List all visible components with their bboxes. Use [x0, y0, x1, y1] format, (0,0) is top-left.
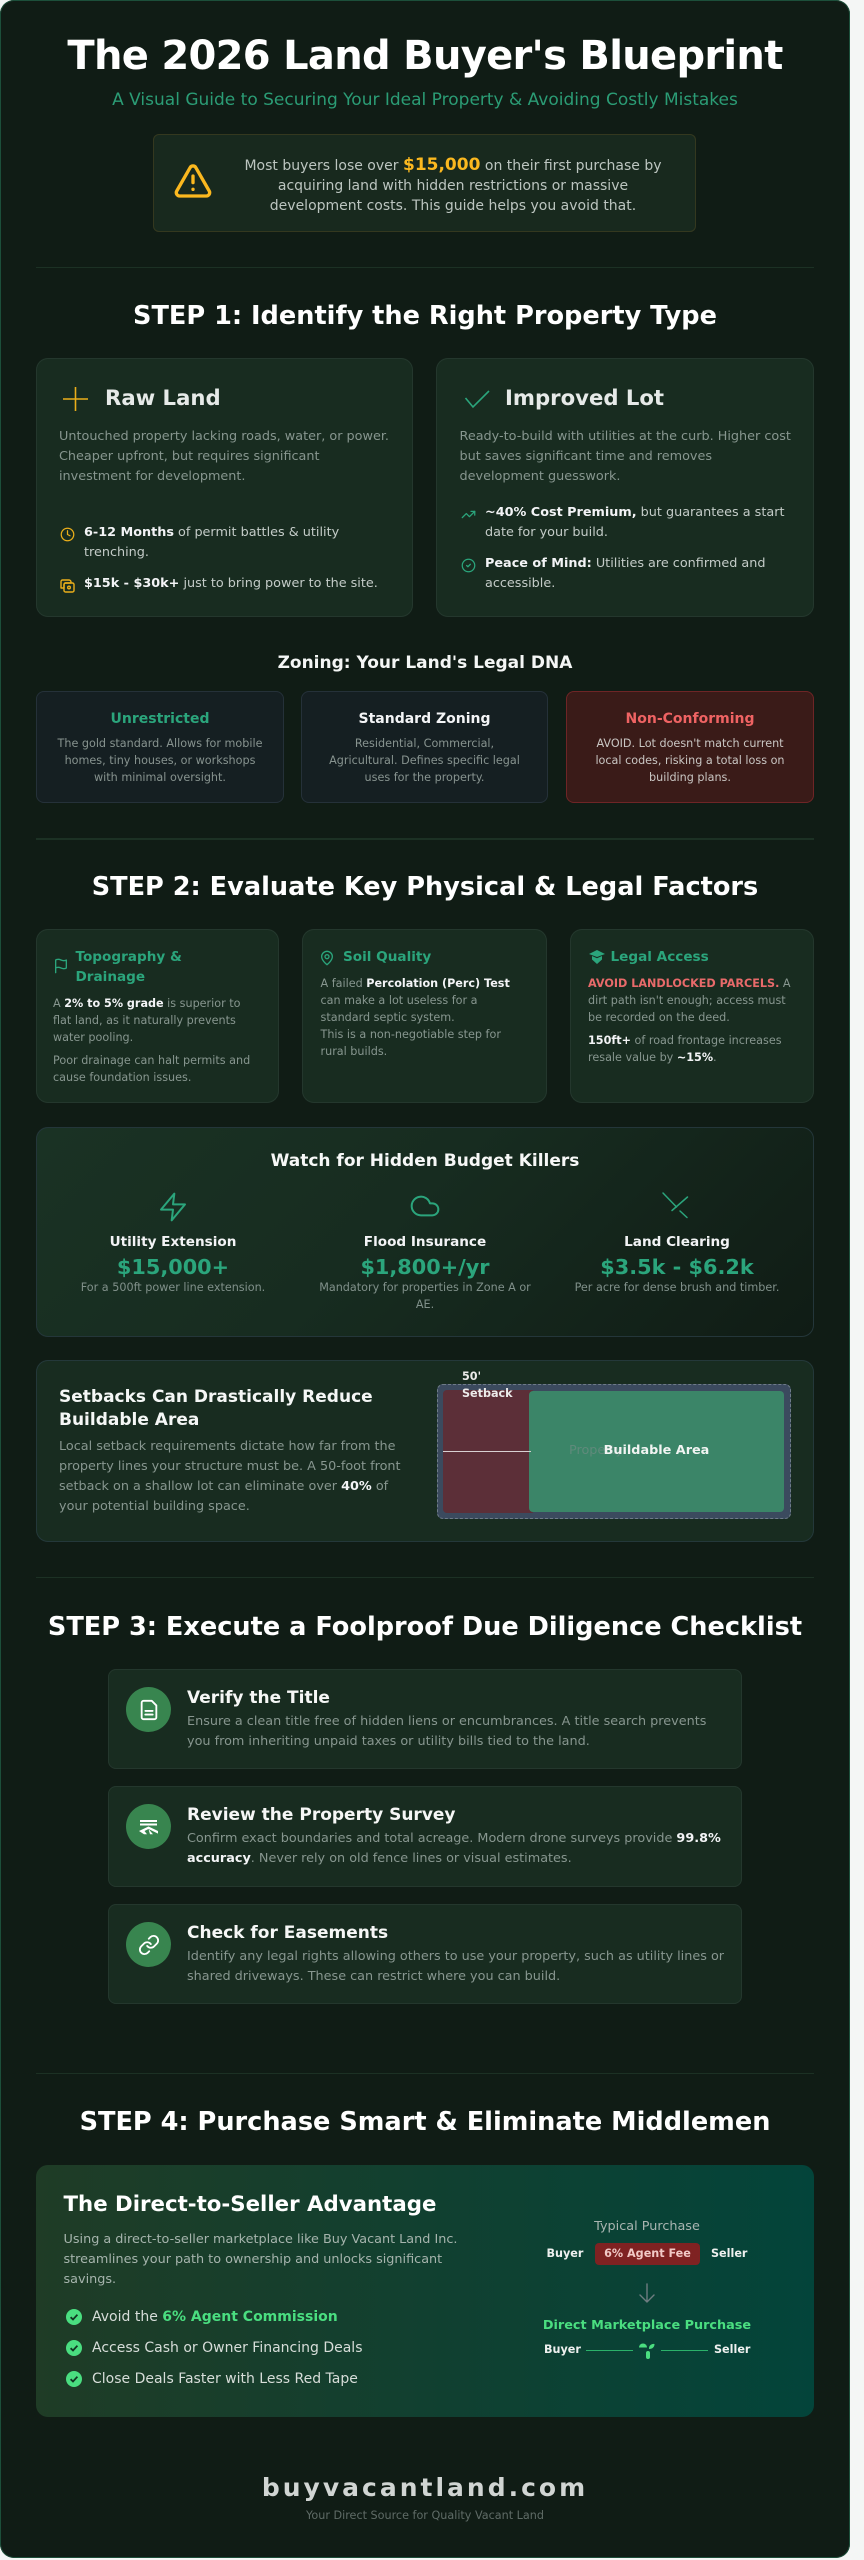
direct purchase label: Direct Marketplace Purchase [543, 2318, 751, 2333]
standard zoning description: Agricultural. Defines specific legal [329, 754, 520, 767]
easements text: Identify any legal rights allowing others to use your property, such as utility lines or [187, 1949, 724, 1964]
setback measure line [443, 1451, 531, 1452]
icon: document [126, 1687, 171, 1732]
callout text [244, 155, 662, 214]
cost premium fact: date for your build. [485, 525, 608, 540]
panel: unrestricted [36, 691, 284, 803]
setbacks heading: Setbacks Can Drastically Reduce [59, 1386, 373, 1406]
permit time fact: trenching. [84, 545, 149, 560]
soil quality text: rural builds. [320, 1044, 387, 1058]
verify title text [187, 1714, 706, 1749]
frontage text: resale value by ~15%. [588, 1050, 717, 1064]
subtitle: A Visual Guide to Securing Your Ideal Property & Avoiding Costly Mistakes [112, 90, 738, 110]
clearing note: Per acre for dense brush and timber. [575, 1281, 779, 1294]
icon: money [60, 579, 75, 593]
topography text [53, 996, 241, 1044]
topography text: flat land, as it naturally prevents [53, 1014, 236, 1026]
setbacks text: setback on a shallow lot can eliminate over 40% of [59, 1479, 388, 1494]
setback label: 50' [462, 1370, 481, 1383]
topography text: A 2% to 5% grade is superior to [53, 996, 241, 1010]
typical purchase label: Typical Purchase [594, 2219, 700, 2234]
panel: hidden budget killers [36, 1127, 814, 1337]
budget killers heading: Watch for Hidden Budget Killers [271, 1151, 579, 1171]
icon: trending up [462, 510, 476, 518]
buildable label: Buildable Area [604, 1443, 709, 1458]
panel: direct-to-seller advantage [36, 2165, 814, 2417]
unrestricted description [58, 737, 262, 784]
peace of mind fact: accessible. [485, 576, 555, 591]
heading: step 4: STEP 4: Purchase Smart & Eliminate Middlemen [80, 2107, 770, 2137]
connecting line right [661, 2350, 708, 2351]
topography title: Drainage [76, 969, 145, 985]
flood note [319, 1281, 531, 1311]
icon: flag [55, 958, 67, 974]
setbacks text: Local setback requirements dictate how far from the [59, 1439, 396, 1454]
soil quality text: can make a lot useless for a [320, 994, 478, 1006]
column: utility extension [81, 1192, 265, 1294]
icon: legal access [589, 950, 605, 964]
setbacks heading [59, 1386, 373, 1430]
panel: topography [36, 929, 279, 1103]
connecting line left [586, 2350, 633, 2351]
survey heading: Review the Property Survey [187, 1805, 456, 1825]
icon: cloud [410, 1196, 440, 1216]
buildable area [529, 1391, 784, 1512]
column: land clearing [575, 1192, 779, 1294]
improved lot description [460, 429, 791, 484]
soil quality text: This is a non-negotiable step for [320, 1028, 501, 1040]
icon: check badge [66, 2340, 82, 2356]
verify title text: Ensure a clean title free of hidden liens or encumbrances. A title search prevents [187, 1714, 706, 1729]
setbacks text: property lines your structure must be. A 50-foot front [59, 1459, 401, 1474]
non-conforming description: building plans. [649, 771, 731, 784]
verify title text: you from inheriting unpaid taxes or utility bills tied to the land. [187, 1734, 590, 1749]
heading: step 2: STEP 2: Evaluate Key Physical & Legal Factors [92, 872, 758, 902]
footer tagline: Your Direct Source for Quality Vacant Land [306, 2509, 544, 2522]
non-conforming description: local codes, risking a total loss on [595, 754, 785, 767]
soil quality title: Soil Quality [343, 949, 431, 965]
soil quality text [320, 976, 510, 1058]
utility note: For a 500ft power line extension. [81, 1281, 265, 1294]
benefit: financing [36, 2164, 814, 2166]
non-conforming title: Non-Conforming [626, 711, 754, 727]
heading: step 1: STEP 1: Identify the Right Property Type [133, 301, 717, 331]
setback diagram [437, 1370, 791, 1519]
setbacks text [59, 1439, 401, 1514]
icon: clock [60, 528, 74, 542]
seller label: Seller [714, 2343, 750, 2356]
title: The 2026 Land Buyer's Blueprint [67, 33, 783, 79]
drainage text: Poor drainage can halt permits and [53, 1054, 250, 1066]
panel: non-conforming [566, 691, 814, 803]
improved lot heading: Improved Lot [505, 385, 664, 410]
clearing label: Land Clearing [624, 1234, 730, 1250]
permit time fact: 6-12 Months of permit battles & utility [84, 525, 339, 540]
setback label: Setback [462, 1387, 513, 1400]
flood note: Mandatory for properties in Zone A or [319, 1281, 531, 1294]
icon: survey [126, 1804, 171, 1849]
easements text [187, 1949, 724, 1984]
panel: legal access [570, 929, 814, 1103]
raw land heading: Raw Land [105, 385, 221, 410]
advantage text: streamlines your path to ownership and unlocks significant [64, 2252, 442, 2267]
setbacks heading: Buildable Area [59, 1410, 199, 1430]
icon: check [465, 390, 490, 408]
legal access text: AVOID LANDLOCKED PARCELS. A [588, 976, 791, 990]
drainage text: cause foundation issues. [53, 1070, 191, 1084]
icon: circle check [462, 558, 476, 572]
power cost fact: $15k - $30k+ just to bring power to the site. [84, 576, 378, 591]
advantage text: savings. [64, 2272, 116, 2287]
advantage text: Using a direct-to-seller marketplace like Buy Vacant Land Inc. [64, 2232, 457, 2247]
non-conforming description [595, 737, 785, 784]
improved lot description: development guesswork. [460, 469, 620, 484]
easements heading: Check for Easements [187, 1923, 388, 1943]
topography title [76, 949, 182, 985]
seller label: Seller [711, 2247, 747, 2260]
icon: cutting tools [662, 1192, 688, 1218]
improved lot description: but saves significant time and removes [460, 449, 712, 464]
panel: soil quality [302, 929, 547, 1103]
survey text: Confirm exact boundaries and total acreage. Modern drone surveys provide 99.8% [187, 1831, 721, 1846]
peace of mind fact: Peace of Mind: Utilities are confirmed and [485, 556, 766, 571]
setback label [462, 1370, 513, 1400]
setback zone [443, 1390, 535, 1513]
commission text: Avoid the 6% Agent Commission [92, 2309, 338, 2325]
legal access title: Legal Access [610, 949, 709, 965]
callout: warning [153, 134, 696, 232]
cost premium fact [485, 505, 784, 540]
panel: improved lot [436, 358, 814, 617]
icon: map pin [321, 950, 333, 966]
raw land description: Untouched property lacking roads, water, or power. [59, 429, 389, 444]
clearing value: $3.5k - $6.2k [600, 1255, 754, 1279]
checklist: easements [108, 1904, 742, 2004]
raw land description [59, 429, 389, 484]
panel: standard zoning [301, 691, 548, 803]
legal access text: dirt path isn't enough; access must [588, 994, 786, 1006]
checklist: property survey [108, 1786, 742, 1887]
callout text: acquiring land with hidden restrictions or massive [278, 178, 628, 194]
buyer label: Buyer [544, 2343, 581, 2356]
raw land description: Cheaper upfront, but requires significant [59, 449, 320, 464]
improved lot description: Ready-to-build with utilities at the curb. Higher cost [460, 429, 791, 444]
legal access text [588, 976, 791, 1024]
unrestricted description: homes, tiny houses, or workshops [65, 754, 255, 767]
easements text: shared driveways. These can restrict where you can build. [187, 1969, 560, 1984]
property lot [437, 1384, 791, 1519]
icon: link [126, 1922, 171, 1967]
icon: check badge [66, 2371, 82, 2387]
verify title heading: Verify the Title [187, 1688, 330, 1708]
standard zoning description: Residential, Commercial, [355, 737, 494, 750]
buyer label: Buyer [546, 2247, 583, 2260]
icon: warning triangle [174, 164, 212, 198]
benefit: faster closing [36, 2164, 814, 2166]
standard zoning description: uses for the property. [365, 771, 484, 784]
soil quality text: standard septic system. [320, 1010, 455, 1024]
heading: zoning: Zoning: Your Land's Legal DNA [278, 653, 572, 673]
unrestricted description: with minimal oversight. [94, 771, 226, 784]
checklist: verify title [108, 1669, 742, 1769]
footer brand: buyvacantland.com [262, 2473, 588, 2502]
callout text: development costs. This guide helps you avoid that. [270, 198, 636, 214]
frontage text: 150ft+ of road frontage increases [588, 1034, 782, 1046]
panel: raw land [36, 358, 413, 617]
standard zoning title: Standard Zoning [358, 711, 490, 727]
icon: check badge [66, 2309, 82, 2325]
heading: step 3: STEP 3: Execute a Foolproof Due Diligence Checklist [48, 1612, 802, 1642]
closing text: Close Deals Faster with Less Red Tape [92, 2371, 358, 2387]
survey text: accuracy. Never rely on old fence lines or visual estimates. [187, 1851, 572, 1866]
non-conforming description: AVOID. Lot doesn't match current [596, 737, 784, 750]
peace of mind fact [485, 556, 766, 591]
raw land description: investment for development. [59, 469, 245, 484]
utility label: Utility Extension [110, 1234, 236, 1250]
benefit: avoid commission [36, 2164, 814, 2166]
icon: lightning [160, 1192, 186, 1222]
utility value: $15,000+ [117, 1255, 229, 1279]
flood value: $1,800+/yr [360, 1255, 490, 1279]
standard zoning description [329, 737, 520, 784]
unrestricted title: Unrestricted [110, 711, 209, 727]
arrow down [639, 2283, 655, 2303]
setbacks text: your potential building space. [59, 1499, 250, 1514]
icon: plus [63, 387, 88, 411]
survey text [187, 1831, 721, 1866]
icon: sprout [638, 2341, 655, 2359]
topography title: Topography & [76, 949, 182, 965]
callout text: Most buyers lose over $15,000 on their first purchase by [244, 155, 662, 175]
advantage heading: The Direct-to-Seller Advantage [64, 2192, 436, 2217]
drainage text [53, 1054, 250, 1084]
flood note: AE. [416, 1298, 434, 1311]
legal access text: be recorded on the deed. [588, 1010, 730, 1024]
flood label: Flood Insurance [364, 1234, 486, 1250]
panel: setbacks [36, 1360, 814, 1542]
advantage text [64, 2230, 457, 2290]
topography text: water pooling. [53, 1030, 133, 1044]
agent fee pill: 6% Agent Fee [604, 2247, 691, 2260]
cost premium fact: ~40% Cost Premium, but guarantees a start [485, 505, 784, 520]
frontage text [588, 1034, 782, 1064]
property faint label: Property [569, 1443, 623, 1458]
permit time fact [84, 525, 339, 560]
column: flood insurance [319, 1196, 531, 1311]
financing text: Access Cash or Owner Financing Deals [92, 2340, 362, 2356]
agent fee pill [595, 2243, 700, 2265]
unrestricted description: The gold standard. Allows for mobile [58, 737, 262, 750]
soil quality text: A failed Percolation (Perc) Test [320, 976, 510, 990]
